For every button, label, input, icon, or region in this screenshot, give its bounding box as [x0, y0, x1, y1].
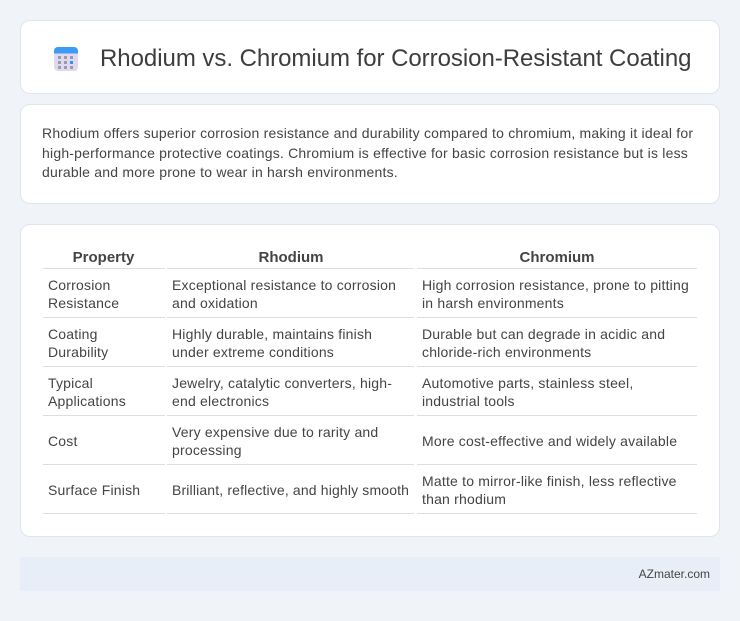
cell: rhodium corrosion — [172, 277, 396, 311]
cell: rhodium corrosion: Exceptional resistance to corrosion — [172, 277, 396, 293]
summary text: high-performance protective coatings. Chromium is effective for basic corrosion resistance but is less — [42, 144, 688, 160]
cell: rhodium applications — [172, 375, 392, 409]
summary text: durable and more prone to wear in harsh environments. — [42, 164, 398, 180]
cell: chromium finish: than rhodium — [422, 491, 506, 507]
cell: chromium finish — [422, 473, 677, 507]
icon: calendar — [54, 47, 78, 71]
cell: chromium corrosion: High corrosion resistance, prone to pitting — [422, 277, 689, 293]
cell: chromium applications — [422, 375, 633, 409]
cell: rhodium finish: Brilliant, reflective, and highly smooth — [172, 482, 409, 498]
cell: chromium corrosion — [422, 277, 689, 311]
cell: chromium cost: More cost-effective and widely available — [422, 433, 677, 449]
row: Coating Durability: Coating — [48, 326, 98, 342]
cell: rhodium applications: Jewelry, catalytic converters, high- — [172, 375, 392, 391]
cell: rhodium cost — [172, 424, 378, 458]
row: Corrosion Resistance — [48, 277, 119, 311]
row: Coating Durability: Durability — [48, 344, 108, 360]
row: Typical Applications: Applications — [48, 393, 126, 409]
title: Rhodium vs. Chromium for Corrosion-Resistant Coating — [100, 45, 691, 72]
cell: chromium applications: Automotive parts, stainless steel, — [422, 375, 633, 391]
row: Corrosion Resistance: Corrosion — [48, 277, 110, 293]
table card — [20, 224, 720, 537]
cell: chromium durability: chloride-rich environments — [422, 344, 591, 360]
summary text — [42, 125, 693, 180]
footer brand: AZmater.com — [639, 567, 710, 581]
header card — [20, 20, 720, 94]
cell: rhodium durability — [172, 326, 372, 360]
summary text: Rhodium offers superior corrosion resistance and durability compared to chromium, making it ideal for — [42, 125, 693, 141]
cell: rhodium durability: Highly durable, maintains finish — [172, 326, 372, 342]
cell: rhodium durability: under extreme conditions — [172, 344, 334, 360]
cell: rhodium cost: Very expensive due to rarity and — [172, 424, 378, 440]
column header: Property: Property — [73, 248, 134, 266]
summary card — [20, 104, 720, 204]
column header: Chromium: Chromium — [520, 248, 594, 266]
row: Coating Durability — [48, 326, 108, 360]
row: Surface Finish: Surface Finish — [48, 482, 140, 498]
row: Typical Applications — [48, 375, 126, 409]
cell: chromium applications: industrial tools — [422, 393, 515, 409]
column header: Rhodium: Rhodium — [258, 248, 324, 266]
footer bar — [20, 557, 720, 591]
cell: chromium durability — [422, 326, 665, 360]
cell: chromium finish: Matte to mirror-like finish, less reflective — [422, 473, 677, 489]
cell: rhodium cost: processing — [172, 442, 242, 458]
row: Corrosion Resistance: Resistance — [48, 295, 119, 311]
cell: chromium durability: Durable but can degrade in acidic and — [422, 326, 665, 342]
cell: chromium corrosion: in harsh environments — [422, 295, 564, 311]
row: Cost: Cost — [48, 433, 78, 449]
cell: rhodium corrosion: and oxidation — [172, 295, 258, 311]
cell: rhodium applications: end electronics — [172, 393, 269, 409]
row: Typical Applications: Typical — [48, 375, 93, 391]
